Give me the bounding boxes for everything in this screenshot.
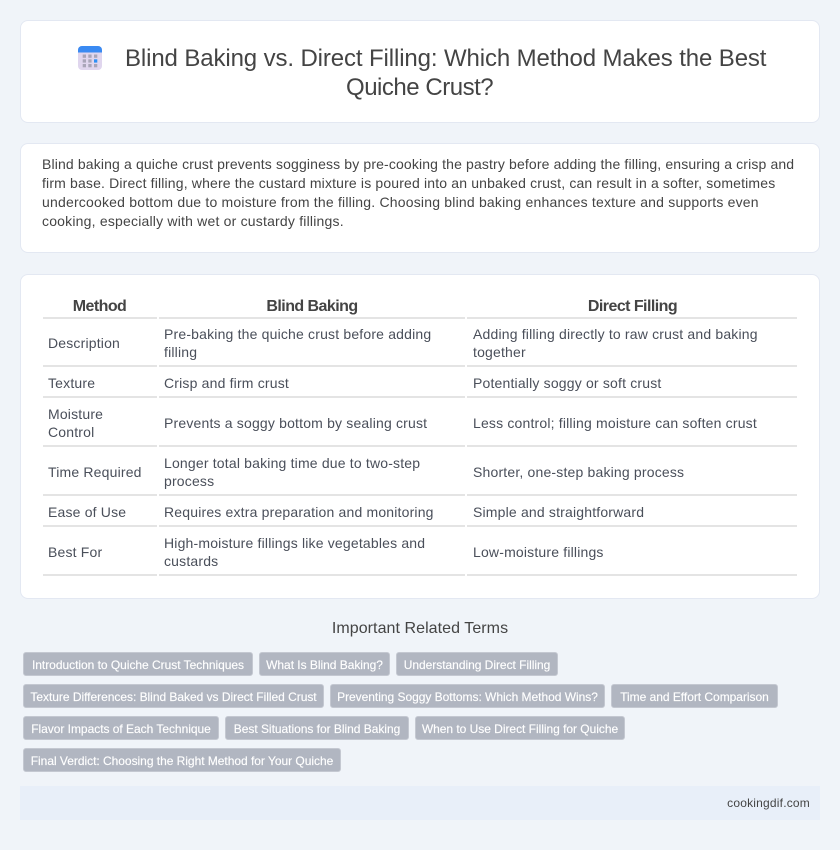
table header: method: Method: [73, 298, 126, 315]
related terms heading: Important Related Terms: [332, 620, 508, 637]
title: Quiche Crust?: [346, 74, 493, 101]
row: time required: Time Required: [48, 464, 142, 480]
tag: What Is Blind Baking?: [266, 658, 383, 672]
intro paragraph: [42, 156, 794, 229]
tag: [259, 652, 390, 676]
row: time required: process: [164, 473, 214, 489]
tag: Understanding Direct Filling: [404, 658, 550, 672]
intro paragraph: undercooked bottom due to moisture from the filling. Choosing blind baking enhances texture and supports even: [42, 194, 759, 210]
row: texture: Potentially soggy or soft crust: [473, 375, 661, 391]
row: time required: [48, 455, 684, 489]
tag: Best Situations for Blind Baking: [234, 722, 400, 736]
row: description: Description: [48, 335, 120, 351]
row: moisture control: Moisture: [48, 406, 103, 422]
table header: blind baking: Blind Baking: [266, 298, 358, 315]
row: description: filling: [164, 344, 197, 360]
tag: [415, 716, 625, 740]
row: ease of use: Requires extra preparation and monitoring: [164, 504, 434, 520]
row: moisture control: [48, 406, 757, 440]
table header: direct filling: Direct Filling: [588, 298, 677, 315]
related terms tags: [23, 652, 778, 772]
tag: [396, 652, 558, 676]
row: texture: [48, 375, 662, 391]
row: description: together: [473, 344, 526, 360]
row: description: Adding filling directly to raw crust and baking: [473, 326, 758, 342]
intro paragraph: firm base. Direct filling, where the custard mixture is poured into an unbaked crust, can result in a softer, sometimes: [42, 175, 775, 191]
tag: [23, 684, 324, 708]
row: time required: Shorter, one-step baking process: [473, 464, 684, 480]
tag: Introduction to Quiche Crust Techniques: [32, 658, 244, 672]
comparison table: [43, 298, 797, 576]
row: ease of use: Simple and straightforward: [473, 504, 644, 520]
title: Blind Baking vs. Direct Filling: Which Method Makes the Best: [125, 45, 766, 72]
row: texture: Texture: [48, 375, 95, 391]
tag: Preventing Soggy Bottoms: Which Method Wins?: [337, 690, 598, 704]
row: best for: custards: [164, 553, 218, 569]
row: description: Pre-baking the quiche crust before adding: [164, 326, 431, 342]
tag: Flavor Impacts of Each Technique: [31, 722, 211, 736]
intro paragraph card: [20, 143, 820, 253]
row: ease of use: Ease of Use: [48, 504, 126, 520]
tag: [225, 716, 409, 740]
row: moisture control: Control: [48, 424, 94, 440]
row: time required: Longer total baking time due to two-step: [164, 455, 420, 471]
row: description: [48, 326, 758, 360]
tag: [23, 716, 219, 740]
footer source: cookingdif.com: [727, 796, 810, 810]
intro paragraph: Blind baking a quiche crust prevents sogginess by pre-cooking the pastry before adding the filling, ensuring a crisp and: [42, 156, 794, 172]
row: moisture control: Prevents a soggy bottom by sealing crust: [164, 415, 427, 431]
row: moisture control: Less control; filling moisture can soften crust: [473, 415, 757, 431]
row: best for: High-moisture fillings like vegetables and: [164, 535, 425, 551]
tag: Texture Differences: Blind Baked vs Direct Filled Crust: [30, 690, 317, 704]
tag: [330, 684, 605, 708]
tag: [23, 652, 253, 676]
footer bar: [20, 786, 820, 820]
row: best for: Low-moisture fillings: [473, 544, 604, 560]
tag: [611, 684, 778, 708]
tag: [23, 748, 341, 772]
tag: Final Verdict: Choosing the Right Method for Your Quiche: [31, 754, 333, 768]
comparison table panel: [20, 274, 820, 599]
intro paragraph: cooking, especially with wet or custardy fillings.: [42, 213, 344, 229]
header card: [20, 20, 820, 123]
row: ease of use: [48, 504, 644, 520]
tag: When to Use Direct Filling for Quiche: [422, 722, 618, 736]
title: [125, 45, 766, 101]
row: best for: [48, 535, 604, 569]
tag: Time and Effort Comparison: [620, 690, 769, 704]
icon: calendar: [78, 46, 102, 70]
row: best for: Best For: [48, 544, 102, 560]
row: texture: Crisp and firm crust: [164, 375, 289, 391]
